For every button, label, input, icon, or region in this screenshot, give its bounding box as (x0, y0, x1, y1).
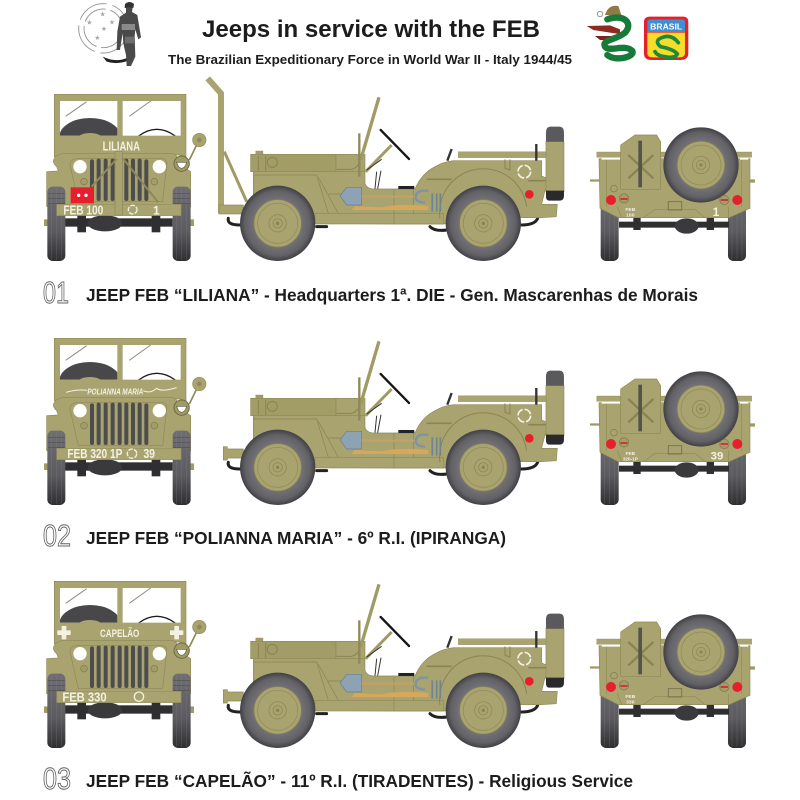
caption 01: JEEP FEB “LILIANA” - Headquarters 1ª. DIE - Gen. Mascarenhas de Morais (86, 285, 698, 305)
number 01: 01 (43, 275, 69, 310)
jeep 01: front view (44, 94, 206, 261)
jeep 02: rear view: 320-1P (623, 457, 638, 462)
caption 02: JEEP FEB “POLIANNA MARIA” - 6º R.I. (IPIRANGA) (86, 528, 506, 548)
rear plate: FEB (625, 694, 636, 700)
header logo: walking soldier (103, 2, 141, 66)
name: Liliana: LILIANA (103, 140, 140, 154)
jeep 01: rear view: 100 (626, 213, 635, 219)
jeep 03: rear view: 330 (626, 700, 635, 706)
rear plate: FEB (626, 451, 636, 456)
plate: FEB 320 1P 39: 39 (143, 447, 155, 461)
jeep 03: side view (223, 584, 564, 748)
white crosses (57, 626, 183, 639)
name: Capelão: CAPELÃO (100, 627, 139, 640)
number 03: 03 (43, 761, 71, 796)
jeep 02: front view (44, 338, 206, 505)
jeep 03: front view (44, 581, 206, 748)
plate: FEB 330: FEB 330 (62, 689, 107, 704)
plate: unit number (128, 203, 160, 217)
rear plate: FEB (625, 207, 636, 213)
title: Jeeps in service with the FEB (202, 16, 540, 43)
header logo: smoking snake (587, 6, 633, 58)
number 02: 02 (43, 518, 71, 553)
subtitle: The Brazilian Expeditionary Force in World War II - Italy 1944/45 (168, 52, 572, 67)
plate: FEB 320 1P 39: FEB 320 1P (67, 447, 123, 461)
header logo: Brasil shoulder badge (644, 17, 688, 60)
rear number: 39 (711, 451, 723, 463)
jeep 03: rear view (590, 614, 755, 748)
rear number: 1 (713, 205, 720, 219)
scroll name: Polianna Maria: POLIANNA MARIA (87, 386, 143, 396)
scroll name: Polianna Maria (66, 386, 177, 396)
plate: FEB 100: FEB 100 (63, 202, 103, 217)
jeep 02: rear view (590, 371, 755, 505)
header logo: Brasil shoulder badge: BRASIL (650, 22, 682, 31)
jeep 01: side view with wire cutter (208, 78, 564, 261)
jeep 02: side view (223, 341, 564, 505)
plate: unit number: 1 (153, 203, 160, 217)
header logo: Brazilian star ring emblem (75, 0, 132, 57)
jeep 01: rear view (590, 127, 755, 261)
caption 03: JEEP FEB “CAPELÃO” - 11º R.I. (TIRADENTES) - Religious Service (86, 770, 633, 791)
red rank plate (71, 187, 94, 203)
plate: FEB 330 (62, 689, 144, 704)
